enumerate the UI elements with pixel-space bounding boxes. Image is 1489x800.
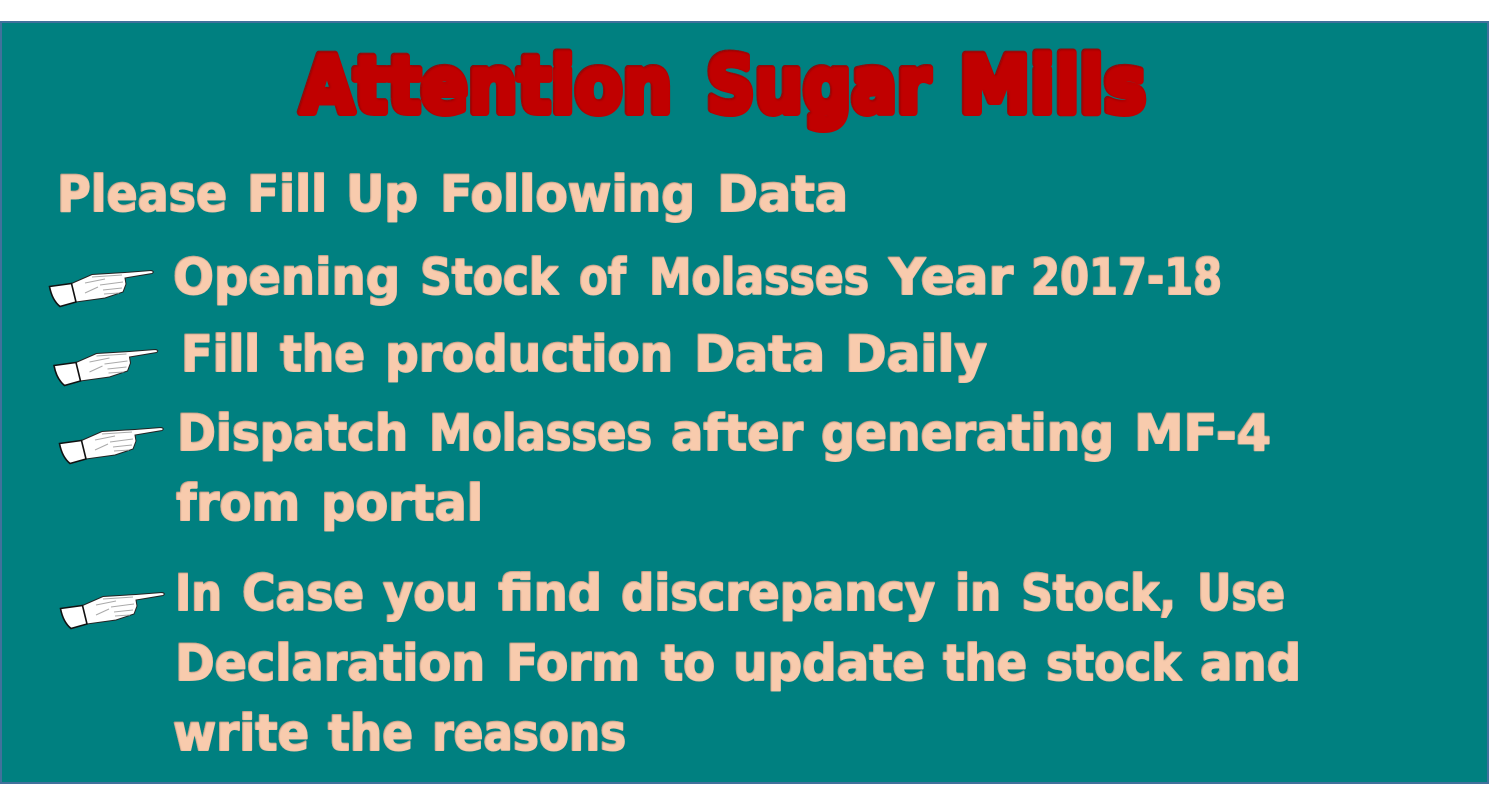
bullet text: stock discrepancy: Form — [506, 634, 640, 692]
bullet text: opening stock: Stock — [420, 248, 560, 306]
bullet text: stock discrepancy: the — [328, 704, 413, 762]
bullet text: dispatch molasses: Dispatch — [177, 404, 408, 462]
bullet text: opening stock: 2017-18 — [1031, 248, 1222, 306]
bullet text: production data — [181, 325, 987, 383]
bullet text: stock discrepancy: Declaration — [175, 634, 485, 692]
bullet text: stock discrepancy: Use — [1197, 564, 1285, 622]
bullet text: stock discrepancy: you — [383, 564, 478, 622]
bullet text: dispatch molasses: portal — [321, 474, 483, 532]
icon: pointing hand 4 — [60, 592, 164, 628]
bullet text: stock discrepancy — [173, 564, 1301, 762]
title: Attention — [300, 41, 672, 131]
bullet text: dispatch molasses — [176, 404, 1271, 532]
bullet text: stock discrepancy: Case — [242, 564, 364, 622]
bullet text: stock discrepancy: In — [175, 564, 222, 622]
icon: pointing hand 3 — [60, 428, 163, 464]
bullet text: stock discrepancy: write — [173, 704, 309, 762]
bullet text: stock discrepancy: Stock, — [1021, 564, 1176, 622]
bullet text: opening stock: Opening — [173, 248, 400, 306]
heading: please fill up: Data — [717, 165, 848, 223]
bullet text: stock discrepancy: stock — [1046, 634, 1183, 692]
bullet text: stock discrepancy: update — [733, 634, 925, 692]
bullet text: opening stock: of — [579, 248, 627, 306]
bullet text: production data: Fill — [181, 325, 260, 383]
heading: please fill up: Following — [440, 165, 695, 223]
title: Mills — [959, 41, 1146, 131]
icon: pointing hand 1 — [50, 270, 153, 306]
bullet text: production data: production — [385, 325, 673, 383]
bullet text: stock discrepancy: reasons — [432, 704, 626, 762]
bullet text: dispatch molasses: MF-4 — [1134, 404, 1271, 462]
heading: please fill up: Fill — [247, 165, 327, 223]
bullet text: stock discrepancy: in — [955, 564, 1001, 622]
bullet text: opening stock — [173, 248, 1222, 306]
bullet text: stock discrepancy: and — [1200, 634, 1301, 692]
bullet text: production data: Daily — [845, 325, 987, 383]
bullet text: dispatch molasses: Molasses — [429, 404, 652, 462]
title — [300, 41, 1146, 131]
bullet text: dispatch molasses: after — [671, 404, 803, 462]
bullet text: production data: Data — [694, 325, 825, 383]
bullet text: stock discrepancy: discrepancy — [621, 564, 935, 622]
bullet text: production data: the — [280, 325, 365, 383]
icon: pointing hand 2 — [54, 350, 158, 386]
title: Sugar — [706, 41, 930, 131]
bullet text: dispatch molasses: from — [176, 474, 300, 532]
bullet text: stock discrepancy: to — [661, 634, 715, 692]
bullet text: stock discrepancy: the — [943, 634, 1027, 692]
bullet text: opening stock: Molasses — [649, 248, 869, 306]
heading: please fill up: Please — [57, 165, 227, 223]
bullet text: dispatch molasses: generating — [821, 404, 1114, 462]
heading: please fill up: Up — [346, 165, 418, 223]
heading: please fill up — [57, 165, 848, 223]
bullet text: stock discrepancy: find — [498, 564, 602, 622]
bullet text: opening stock: Year — [888, 248, 1013, 306]
